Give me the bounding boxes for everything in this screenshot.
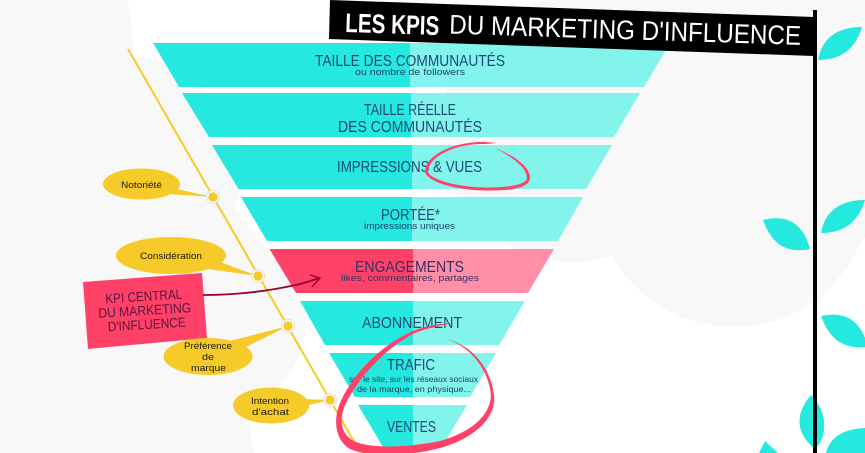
- band: trafic: de la marque, en physique...: [357, 384, 471, 394]
- band: portée: PORTÉE*: [381, 207, 440, 224]
- callout: intention d'achat: d'achat: [252, 407, 289, 418]
- callout: notoriété: [103, 168, 220, 204]
- callout: préférence de marque: marque: [191, 363, 226, 374]
- vertical pole: [813, 10, 817, 453]
- callout: kpi central box: KPI CENTRAL: [105, 287, 183, 306]
- leaves: [759, 27, 865, 453]
- callout: notoriété: Notoriété: [121, 180, 162, 191]
- callout: intention d'achat: [233, 388, 336, 424]
- band: taille des communautés: ou nombre de followers: [355, 67, 465, 78]
- band: engagements: likes, commentaires, partages: [341, 273, 479, 284]
- arrow: kpi central to engagements: [203, 275, 320, 295]
- band: trafic: [329, 353, 496, 397]
- band: taille des communautés: [153, 43, 670, 87]
- highlight circle: impressions et vues: [425, 142, 530, 191]
- band: taille des communautés: TAILLE DES COMMUNAUTÉS: [315, 53, 505, 70]
- band: engagements: [270, 249, 554, 293]
- title banner: [329, 0, 814, 56]
- callout: considération: [116, 237, 264, 282]
- band: abonnement: [300, 301, 525, 345]
- callout: préférence de marque: de: [202, 352, 214, 363]
- band: trafic: sur le site, sur les réseaux sociaux: [349, 374, 479, 384]
- band: portée: impressions uniques: [364, 221, 455, 232]
- band: ventes: VENTES: [387, 419, 436, 436]
- band: taille réelle des communautés: TAILLE RÉELLE: [364, 102, 456, 119]
- callout: intention d'achat: Intention: [251, 396, 289, 407]
- band: impressions et vues: IMPRESSIONS & VUES: [337, 159, 482, 176]
- band: portée: [241, 197, 583, 241]
- band: impressions et vues: [212, 145, 612, 189]
- band: ventes: [358, 405, 467, 447]
- callout: kpi central box: DU MARKETING: [98, 300, 192, 321]
- callout: kpi central box: D'INFLUENCE: [107, 315, 186, 334]
- band: taille réelle des communautés: DES COMMUNAUTÉS: [338, 119, 482, 136]
- callout: préférence de marque: [164, 320, 294, 375]
- callout: préférence de marque: Préférence: [184, 341, 232, 352]
- band: abonnement: ABONNEMENT: [362, 315, 462, 332]
- band: taille réelle des communautés: [182, 93, 640, 137]
- title: les kpis: LES KPIS: [345, 8, 440, 41]
- title: du marketing d'influence: DU MARKETING D'INFLUENCE: [449, 10, 802, 51]
- callout: considération: Considération: [140, 251, 202, 262]
- callout: kpi central box: [83, 273, 207, 349]
- band: engagements: ENGAGEMENTS: [355, 259, 464, 276]
- band: trafic: TRAFIC: [387, 357, 435, 374]
- yellow timeline: [128, 49, 356, 445]
- highlight circle: trafic et ventes: [336, 323, 494, 453]
- funnel: [153, 43, 670, 447]
